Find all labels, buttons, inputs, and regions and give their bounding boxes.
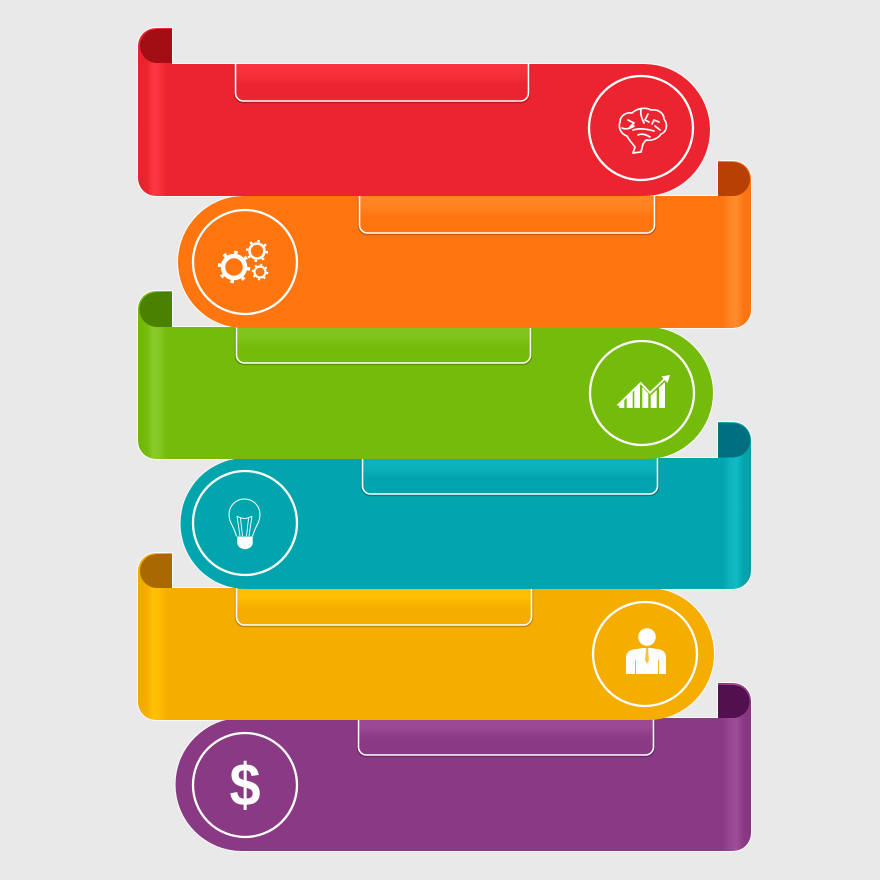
icon ring: teal bbox=[193, 471, 297, 575]
icon ring: green bbox=[590, 341, 694, 445]
icon: businessman bbox=[626, 628, 666, 674]
icon ring: purple bbox=[193, 733, 297, 837]
icon ring: orange bbox=[193, 210, 297, 314]
tab: teal bbox=[362, 458, 658, 495]
fold: teal bbox=[718, 423, 750, 458]
band 5: yellow ribbon bbox=[138, 553, 714, 720]
fold: green bbox=[140, 292, 172, 327]
icon: dollar sign: $ bbox=[229, 753, 261, 819]
tab: orange bbox=[359, 196, 655, 234]
band 4: teal ribbon bbox=[180, 422, 751, 589]
band 6: purple ribbon bbox=[176, 683, 751, 851]
tab: green bbox=[236, 327, 531, 364]
icon: growth chart bbox=[618, 375, 670, 408]
icon: brain bbox=[619, 108, 666, 153]
band 1: red ribbon bbox=[138, 28, 710, 196]
fold: yellow bbox=[140, 554, 172, 588]
icon ring: red bbox=[589, 76, 693, 180]
tab: red bbox=[235, 64, 529, 102]
fold: purple bbox=[718, 685, 750, 718]
band 2: orange ribbon bbox=[178, 161, 751, 328]
icon ring: yellow bbox=[593, 602, 697, 706]
fold: red bbox=[140, 29, 172, 63]
tab: yellow bbox=[236, 588, 532, 626]
icon: light bulb bbox=[229, 499, 260, 549]
icon: gears bbox=[220, 241, 267, 282]
fold: orange bbox=[718, 162, 750, 196]
band 3: green ribbon bbox=[138, 291, 713, 459]
tab: purple bbox=[358, 718, 654, 756]
